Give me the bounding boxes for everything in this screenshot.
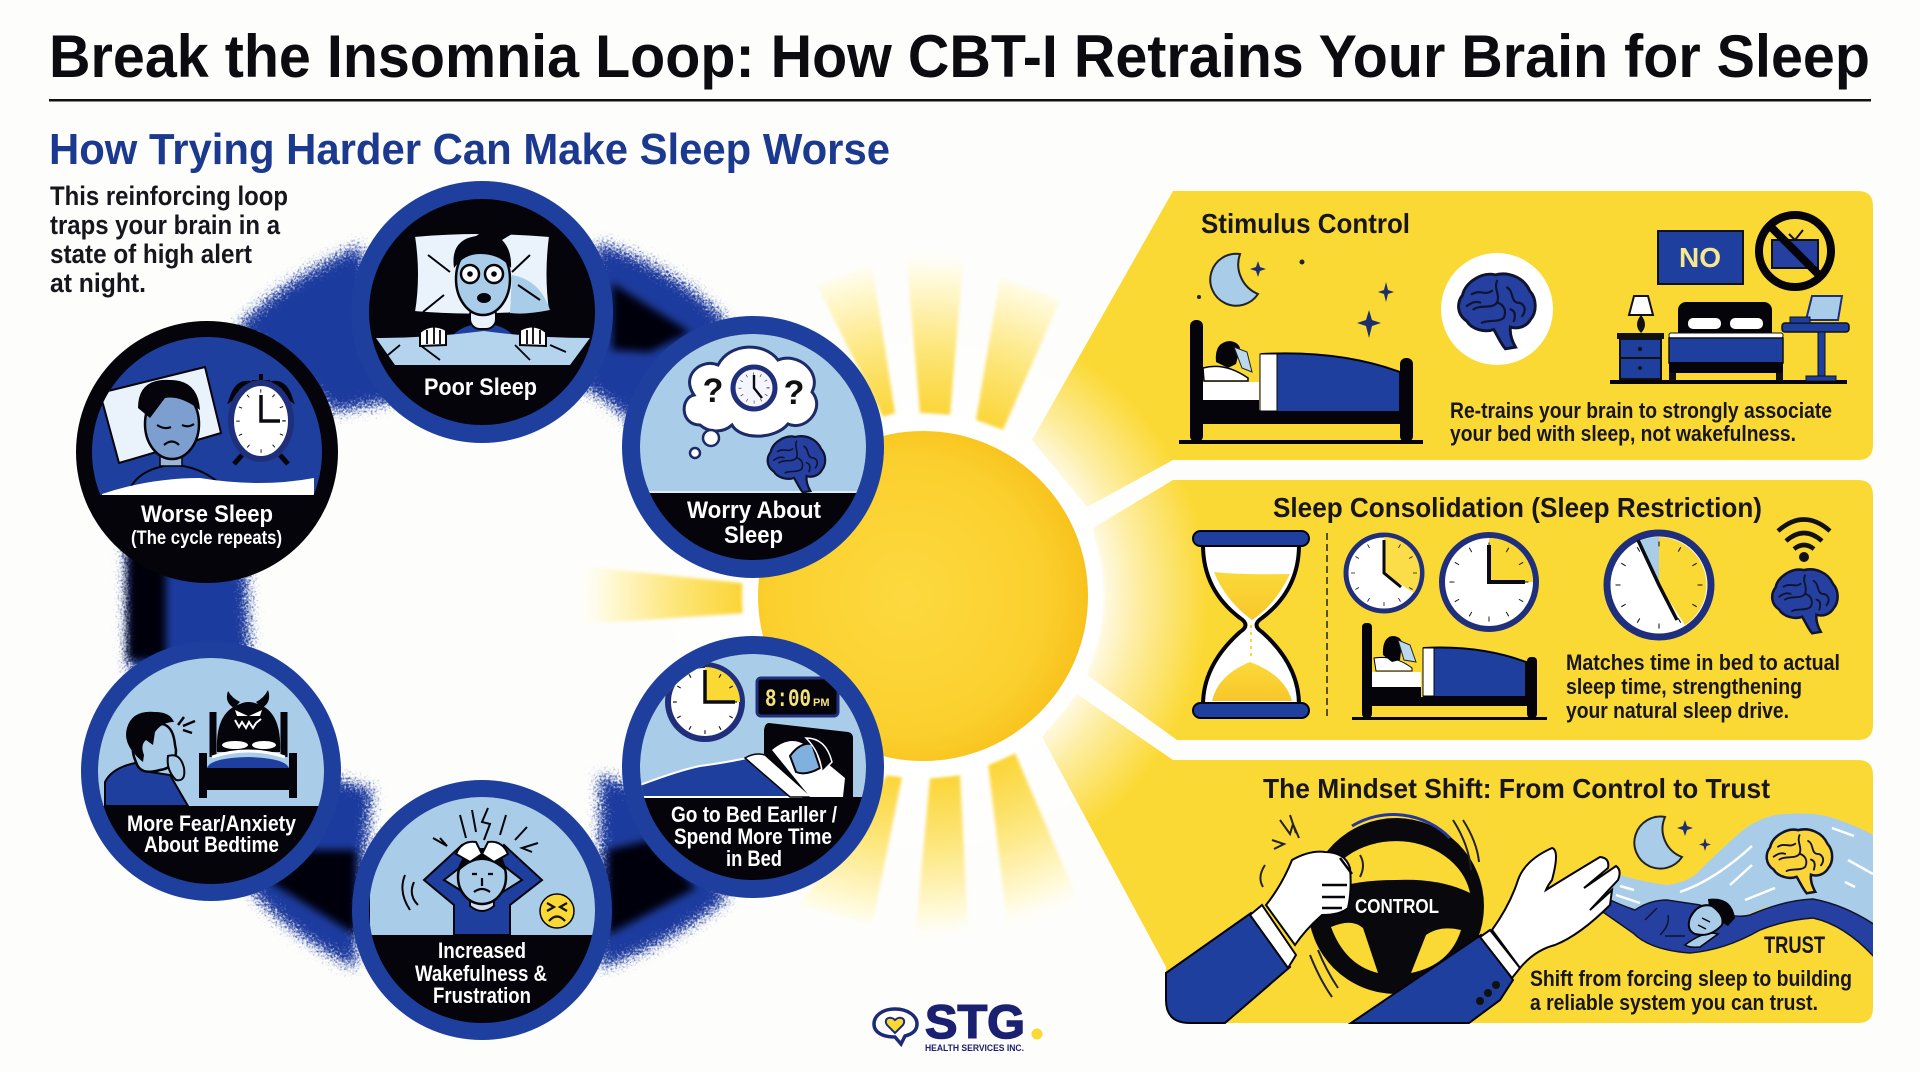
icon: monster over bed: [203, 690, 293, 798]
step: Increased Wakefulness: [352, 780, 612, 1040]
description: a reliable system you can trust.: [1530, 990, 1818, 1015]
description: your natural sleep drive.: [1566, 698, 1789, 723]
icon: clock medium: [1442, 535, 1536, 629]
icon: moon: [1634, 817, 1711, 869]
intro text: [50, 181, 288, 298]
panel backgrounds: yellow arrows pointing to the sun: [1032, 191, 1873, 1023]
step: Go to Bed Earlier: Spend More Time: [674, 824, 832, 849]
motion marks: [1310, 820, 1479, 997]
icon: steering wheel: [1308, 814, 1484, 994]
icon: yellow brain: [1767, 829, 1832, 893]
intro text: state of high alert: [50, 239, 252, 269]
icon: no TV: [1759, 215, 1831, 287]
panel: Sleep Consolidation: [1193, 492, 1840, 723]
trust label: TRUST: [1764, 932, 1825, 959]
icon: person in bed: [640, 723, 853, 797]
label: Go to Bed Earller /: [671, 802, 837, 827]
icon: awake person: [376, 230, 590, 365]
sun rays: [570, 240, 1080, 940]
step: Increased Wakefulness: Frustration: [433, 983, 531, 1008]
panel: The Mindset Shift: [1166, 773, 1875, 1023]
description: [1566, 650, 1840, 723]
intro text: at night.: [50, 268, 146, 298]
icon: hourglass: [1193, 531, 1309, 718]
label: CONTROL: [1355, 896, 1439, 918]
step: More Fear/Anxiety: [81, 641, 341, 901]
step: Worry About Sleep: [622, 316, 884, 578]
reinforcing loop ring: [126, 243, 728, 968]
logo: HEALTH SERVICES INC.: [925, 1043, 1024, 1054]
icon: chat heart: [874, 1009, 917, 1044]
description: [1530, 966, 1852, 1015]
icon: sleeping person in bed: [1352, 623, 1547, 720]
description: Matches time in bed to actual: [1566, 650, 1840, 675]
dashed divider: [1326, 533, 1328, 718]
step: Increased Wakefulness: Wakefulness &: [415, 961, 547, 986]
icon: calm wave with sleeper: [1600, 814, 1875, 958]
sub heading: How Trying Harder Can Make Sleep Worse: [49, 125, 890, 174]
sun: [758, 431, 1088, 761]
icon: frustrated person: [402, 808, 542, 935]
panel glow near the sun: [638, 311, 1208, 881]
icon: NO sign: NO: [1679, 242, 1721, 273]
label: Poor Sleep: [424, 374, 537, 401]
icon: thought cloud with clock: [684, 347, 817, 458]
blanket: [102, 478, 314, 495]
step: Worry About Sleep: Sleep: [724, 522, 783, 549]
step: Worse Sleep: [76, 321, 338, 583]
heading: The Mindset Shift: From Control to Trust: [1263, 773, 1770, 804]
description: [1450, 398, 1832, 446]
icon: anxious person: [105, 712, 195, 806]
label: Increased: [438, 938, 526, 963]
label: Worry About: [687, 497, 821, 524]
icon: digital clock: PM: [813, 697, 830, 709]
label: Worse Sleep: [141, 501, 273, 528]
description: sleep time, strengthening: [1566, 674, 1802, 699]
step: Poor Sleep: [351, 181, 613, 443]
intro text: This reinforcing loop: [50, 181, 288, 211]
description: your bed with sleep, not wakefulness.: [1450, 421, 1796, 446]
icon: signal over brain: [1772, 520, 1838, 633]
icon: digital clock: 8:00: [765, 685, 811, 714]
heading: Stimulus Control: [1201, 208, 1410, 239]
icon: wall clock: [668, 665, 742, 739]
icon: brain in white circle: [1441, 253, 1553, 365]
icon: clock small: [1346, 535, 1422, 611]
title: Break the Insomnia Loop: How CBT-I Retrains Your Brain for Sleep: [49, 23, 1870, 90]
icon: thought cloud with clock: ?: [703, 372, 723, 410]
description: Shift from forcing sleep to building: [1530, 966, 1852, 991]
step: More Fear/Anxiety: About Bedtime: [144, 832, 279, 857]
icon: gripping hand and sleeve: [1166, 815, 1363, 1023]
step: Go to Bed Earlier: [622, 636, 884, 898]
logo: [874, 995, 1042, 1054]
step: Go to Bed Earlier: in Bed: [726, 846, 782, 871]
icon: angry face: [540, 894, 574, 928]
panel: Stimulus Control: [1179, 208, 1849, 446]
icon: sleeping person in bed: [1179, 320, 1423, 444]
sun halo: [742, 415, 1104, 777]
intro text: traps your brain in a: [50, 210, 281, 240]
icon: open hand and sleeve: [1351, 848, 1620, 1023]
icon: NO sign: [1658, 231, 1743, 284]
icon: brain: [768, 436, 825, 492]
icon: clock large: [1607, 533, 1711, 637]
icon: digital clock: [757, 678, 838, 716]
logo: STG: [925, 995, 1025, 1048]
icon: moon and stars: [1197, 254, 1394, 338]
heading: Sleep Consolidation (Sleep Restriction): [1273, 492, 1762, 523]
icon: alarm clock: [231, 374, 291, 464]
icon: thought cloud with clock: ?: [784, 374, 804, 412]
label: More Fear/Anxiety: [127, 811, 297, 836]
step: Worse Sleep: (The cycle repeats): [131, 528, 282, 549]
icon: bedroom: [1610, 296, 1849, 384]
icon: tired person: [102, 366, 222, 486]
description: Re-trains your brain to strongly associate: [1450, 398, 1832, 423]
